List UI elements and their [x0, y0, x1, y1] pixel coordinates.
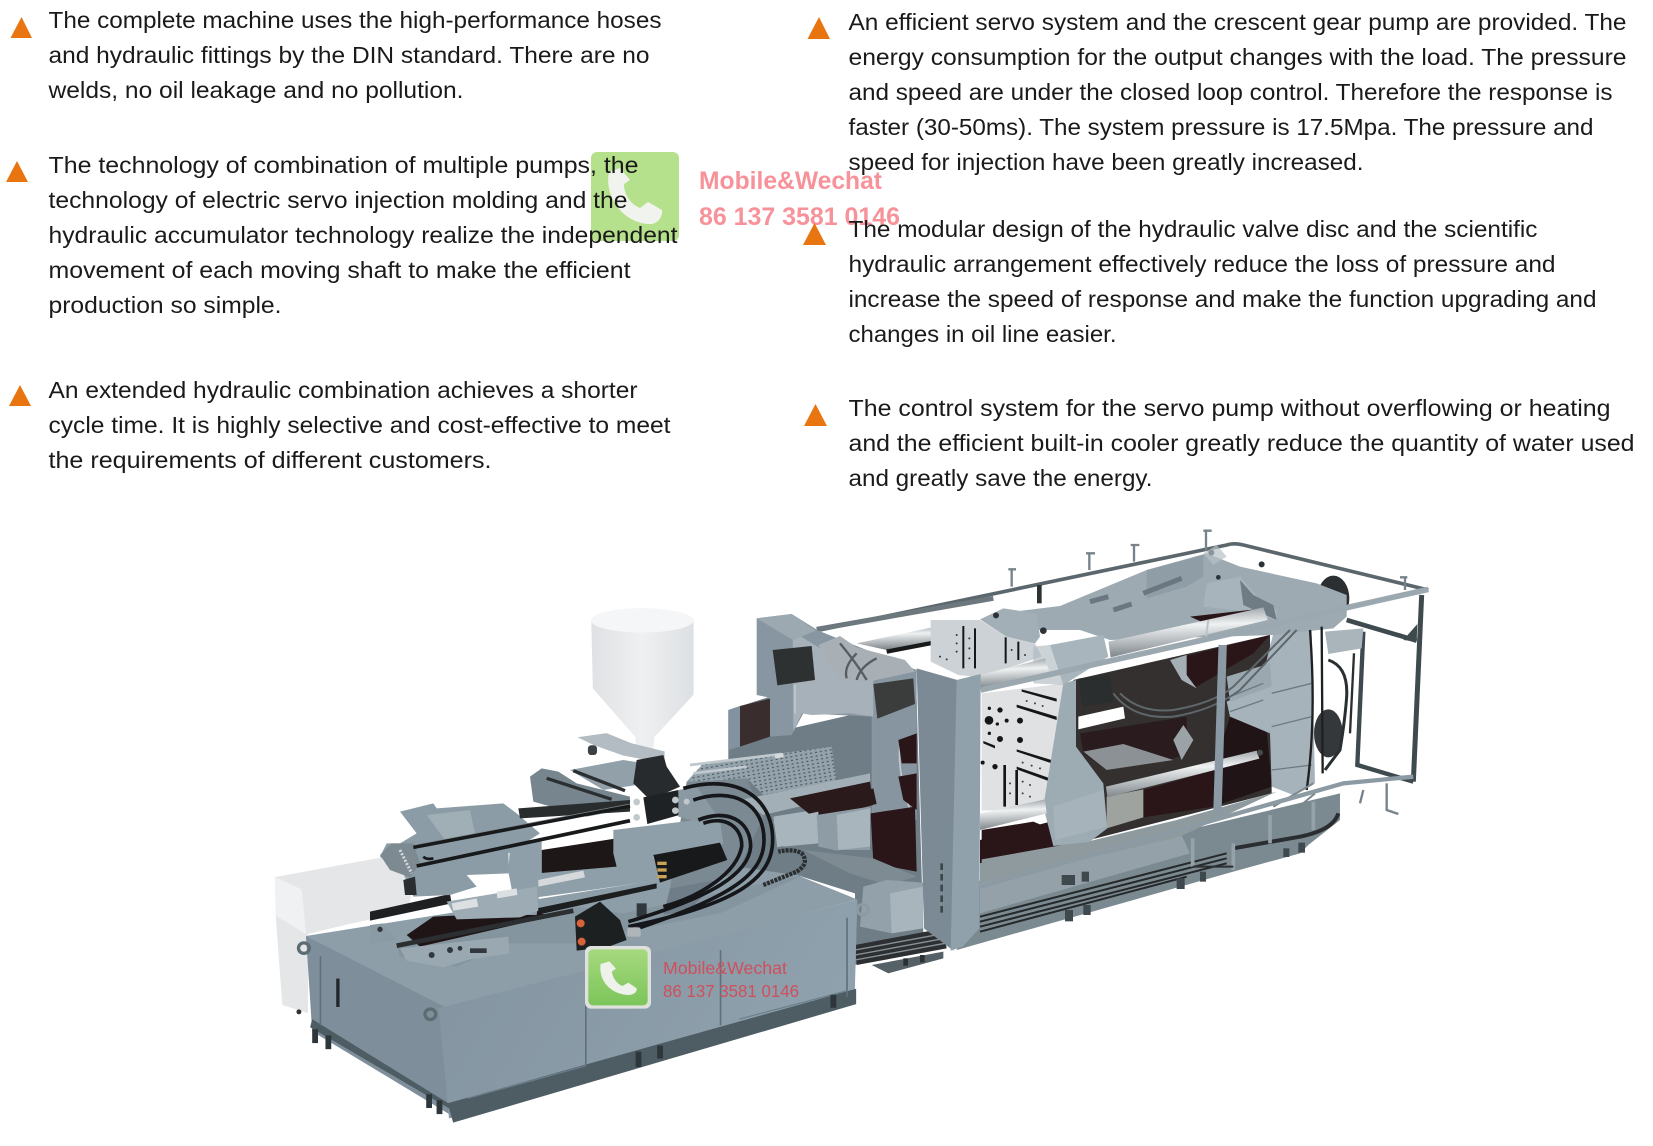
illustration: injection molding machine — [275, 531, 1428, 1123]
icon: orange triangle bullet — [9, 385, 31, 406]
front guard rail — [980, 589, 1428, 887]
icon: orange triangle bullet — [804, 404, 827, 426]
feature: modular valve design: The modular design of the hydraulic valve disc and the scientific — [848, 216, 1538, 242]
carriage bed and rails — [370, 875, 803, 967]
feature: extended hydraulic combination: the requirements of different customers. — [48, 447, 492, 473]
feature: DIN standard hoses — [10, 7, 662, 103]
cable chain — [763, 850, 805, 885]
feature: extended hydraulic combination — [9, 377, 671, 473]
icon: orange triangle bullet — [808, 17, 830, 39]
feature: combination of multiple pumps: production so simple. — [48, 292, 282, 318]
long hydraulic rods — [413, 804, 630, 866]
rear plate with dots — [931, 608, 1047, 677]
feature: servo pump control system — [804, 395, 1634, 491]
panel: left column features — [6, 7, 678, 473]
callout: lower contact watermark — [585, 946, 799, 1009]
feature: servo pump control system: and greatly save the energy. — [848, 465, 1152, 491]
callout: top contact watermark — [591, 152, 900, 241]
interior backdrop — [980, 635, 1277, 883]
feature: modular valve design: changes in oil line easier. — [848, 321, 1116, 347]
feature: combination of multiple pumps: The technology of combination of multiple pumps, the — [48, 152, 638, 178]
feature: efficient servo system: speed for injection have been greatly increased. — [848, 149, 1364, 175]
rear tie bar — [857, 625, 947, 650]
small valve with red ports — [575, 902, 641, 951]
feature: efficient servo system: energy consumption for the output changes with the load. The pressure — [848, 44, 1626, 70]
feature: extended hydraulic combination: cycle time. It is highly selective and cost-effective to meet — [48, 412, 671, 438]
machine base — [299, 867, 868, 1123]
hoses — [628, 784, 773, 932]
valve manifold — [633, 755, 720, 824]
moving platen face with holes — [981, 683, 1070, 811]
barrel backdrop — [670, 778, 763, 888]
feature: DIN standard hoses: welds, no oil leakage and no pollution. — [47, 77, 464, 103]
base and hopper layer — [275, 856, 868, 1123]
front pillar — [917, 668, 981, 951]
fixed platen and rear plates — [728, 598, 1087, 973]
injection motor — [380, 803, 540, 897]
icon: green phone tile — [591, 152, 679, 241]
drive cylinder and motors — [1314, 576, 1363, 770]
feature: DIN standard hoses: The complete machine uses the high-performance hoses — [48, 7, 662, 33]
moving platen column — [1033, 635, 1108, 846]
clamping unit: rear and interior — [820, 531, 1428, 950]
tie bars — [980, 607, 1268, 830]
lower fixed platen supports — [773, 788, 947, 973]
feature: efficient servo system — [808, 9, 1626, 175]
vertical hoses — [1307, 627, 1323, 790]
feature: modular valve design: hydraulic arrangement effectively reduce the loss of pressure and — [848, 251, 1556, 277]
feature: servo pump control system: and the efficient built-in cooler greatly reduce the quantity of water used — [848, 430, 1634, 456]
white block behind base — [275, 856, 416, 1014]
machine bed — [957, 793, 1340, 950]
interior hydraulic lines — [1113, 630, 1297, 717]
feature: combination of multiple pumps: hydraulic accumulator technology realize the independent — [48, 222, 678, 248]
hopper — [578, 608, 694, 764]
control box — [653, 843, 727, 883]
icon: orange triangle bullet — [10, 17, 32, 38]
hydraulic valves, hoses and control box — [575, 755, 805, 951]
panel: right column features — [803, 9, 1634, 491]
feature: combination of multiple pumps: movement of each moving shaft to make the efficient — [48, 257, 631, 283]
feature: efficient servo system: An efficient servo system and the crescent gear pump are provided. The — [848, 9, 1626, 35]
guard frame — [820, 531, 1428, 814]
feature: extended hydraulic combination: An extended hydraulic combination achieves a shorter — [48, 377, 638, 403]
rear guard rail section — [817, 598, 993, 629]
carriage body — [377, 820, 723, 967]
injection unit — [370, 747, 873, 967]
icon: green phone tile — [585, 946, 651, 1009]
icon: orange triangle bullet — [803, 223, 826, 245]
icon: orange triangle bullet — [6, 161, 28, 182]
text: lower mobile and wechat label: Mobile&Wechat — [663, 958, 787, 978]
text: lower phone number: 86 137 3581 0146 — [663, 981, 799, 1001]
feature: efficient servo system: and speed are under the closed loop control. Therefore the response is — [848, 79, 1612, 105]
barrel cover and right blocks — [687, 747, 873, 850]
lower interior strip — [982, 822, 1053, 859]
clamping unit: moving platen column and front rails — [980, 589, 1428, 887]
upper carriage and rods — [518, 760, 667, 818]
feature: servo pump control system: The control system for the servo pump without overflowing or heating — [848, 395, 1610, 421]
feature: modular valve design: increase the speed of response and make the function upgrading and — [848, 286, 1596, 312]
fixed platen body — [728, 614, 917, 820]
text: phone number: 86 137 3581 0146 — [699, 203, 900, 231]
feature: combination of multiple pumps: technology of electric servo injection molding and the — [48, 187, 628, 213]
text: mobile and wechat label: Mobile&Wechat — [699, 167, 883, 195]
feature: combination of multiple pumps — [6, 152, 678, 318]
rear toggle housing — [1000, 545, 1347, 795]
feature: DIN standard hoses: and hydraulic fittings by the DIN standard. There are no — [48, 42, 650, 68]
feature: efficient servo system: faster (30-50ms). The system pressure is 17.5Mpa. The pressure and — [848, 114, 1594, 140]
fixed platen backdrop — [728, 697, 923, 965]
feature: modular valve design — [803, 216, 1596, 347]
